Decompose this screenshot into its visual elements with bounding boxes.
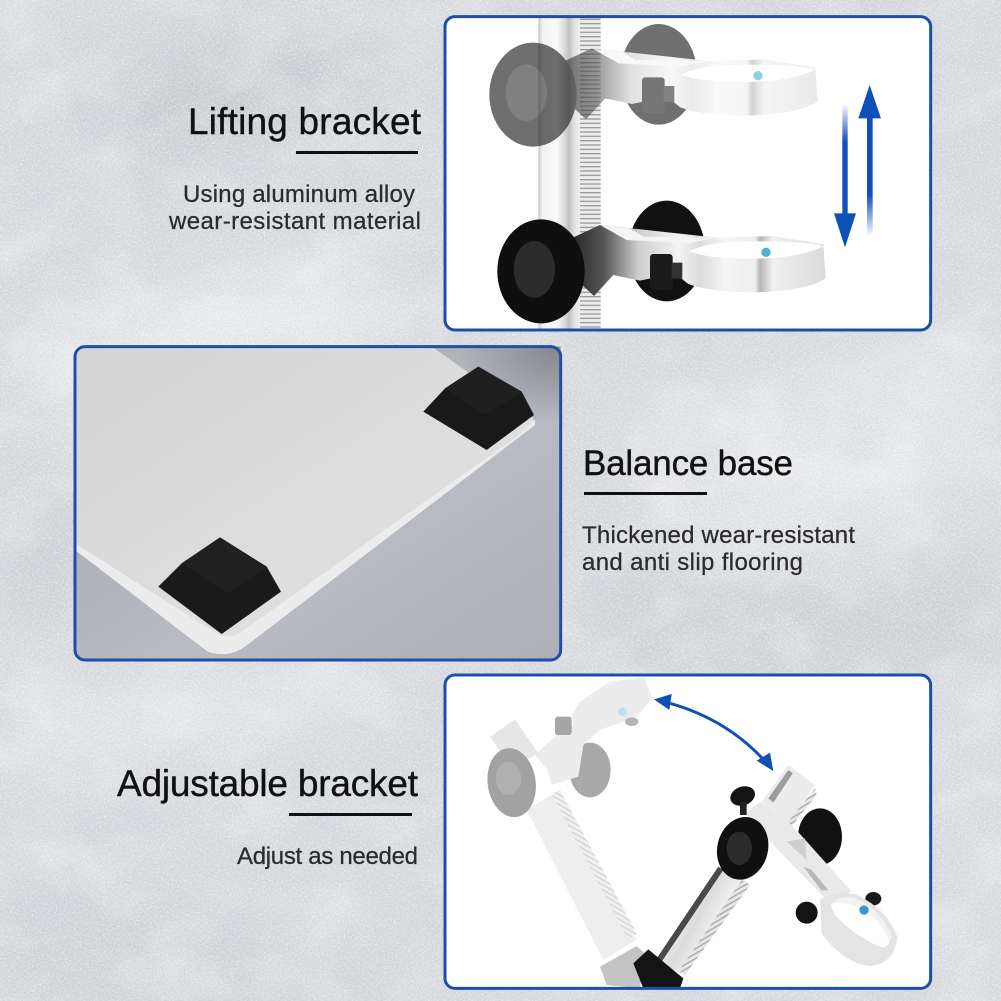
heading underline: Lifting bracket <box>296 151 418 154</box>
arrow: up <box>858 85 881 237</box>
rubber foot: front <box>158 537 281 634</box>
panel: balance base photo <box>73 347 561 660</box>
small knobs <box>728 783 881 924</box>
arrow: down <box>834 103 856 247</box>
text block: balance base description: Thickened wear-resistant <box>582 522 855 549</box>
heading: Adjustable bracket: Adjustable bracket <box>117 763 419 804</box>
text block: balance base description: and anti slip flooring <box>582 549 803 576</box>
heading: Balance base: Balance base <box>583 444 793 483</box>
heading underline: Balance base <box>584 492 707 495</box>
right arm rod <box>653 867 750 975</box>
rear knob <box>798 808 842 865</box>
top post stub <box>762 765 817 828</box>
text block: lifting bracket description: Using aluminum alloy <box>183 181 415 208</box>
ghost upper clamp position <box>489 24 818 147</box>
rubber foot: rear <box>423 367 534 450</box>
text block: lifting bracket description <box>168 181 421 235</box>
black base joint <box>633 949 683 988</box>
text block: balance base description <box>582 522 855 576</box>
heading: Lifting bracket: Lifting bracket <box>188 101 422 142</box>
aluminium plate <box>73 347 535 654</box>
text block: lifting bracket description: wear-resistant material <box>168 208 421 235</box>
panel: lifting bracket photo <box>445 17 931 330</box>
lower clamp and knobs <box>497 201 826 323</box>
front knob <box>716 817 768 880</box>
heading underline: Adjustable bracket <box>289 813 412 816</box>
panel: adjustable bracket photo <box>445 675 931 988</box>
vertical post with rack <box>538 17 601 330</box>
ghost tilted arm <box>483 677 652 988</box>
clamp ring <box>820 893 897 966</box>
arrow: curved double-headed adjustment arc <box>654 694 773 771</box>
text block: adjustable bracket description: Adjust as needed <box>237 843 418 870</box>
bracket arm <box>745 802 852 903</box>
